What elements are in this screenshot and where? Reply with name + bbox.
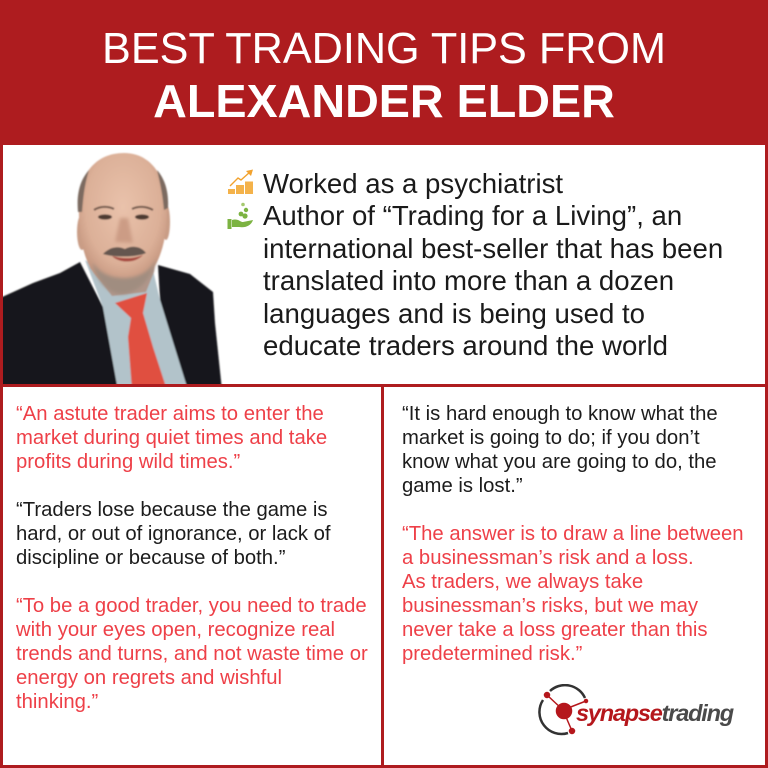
beard: [92, 258, 157, 294]
title: BEST TRADING TIPS FROM: [102, 25, 666, 73]
quote: good trader: thinking.”: [16, 691, 98, 713]
icon: rising chart with coins: [228, 170, 253, 194]
frame right: [765, 145, 768, 768]
moustache: [103, 247, 146, 257]
quote: traders lose: [16, 499, 331, 569]
quote: hard enough: “It is hard enough to know what the: [402, 403, 718, 425]
frame bottom: [0, 765, 768, 768]
quote: answer: a businessman’s risk and a loss.: [402, 547, 694, 569]
logo nodes: [544, 692, 588, 734]
about text: [263, 168, 723, 361]
brows: [94, 207, 153, 210]
eyes: [98, 214, 112, 220]
quote: hard enough: market is going to do; if you don’t: [402, 427, 700, 449]
quote: traders lose: hard, or out of ignorance, or lack of: [16, 523, 331, 545]
logo: synapsetrading: [538, 684, 734, 736]
quote: answer: “The answer is to draw a line between: [402, 523, 744, 545]
vertical divider: [381, 384, 384, 768]
horizontal divider: [0, 384, 768, 387]
quote: hard enough: [402, 403, 718, 497]
neck: [88, 240, 158, 296]
jacket: [0, 262, 222, 390]
quote: answer: never take a loss greater than this: [402, 619, 708, 641]
head: [79, 153, 167, 288]
portrait photo: [3, 152, 222, 384]
nose: [115, 218, 133, 243]
about text: Worked as a psychiatrist: [263, 168, 563, 199]
quote: traders lose: discipline or because of both.”: [16, 547, 285, 569]
quote: answer: [402, 523, 744, 665]
logo wordmark: synapsetrading: [576, 700, 734, 726]
quote: answer: As traders, we always take: [402, 571, 643, 593]
quote: good trader: [16, 595, 368, 713]
ears: [77, 214, 87, 250]
header band: [0, 0, 768, 145]
about text: international best-seller that has been: [263, 233, 723, 264]
quote: astute trader: profits during wild times.”: [16, 451, 240, 473]
quote: astute trader: market during quiet times and take: [16, 427, 327, 449]
right quotes: [402, 403, 744, 665]
quote: good trader: energy on regrets and wishful: [16, 667, 282, 689]
shirt: [85, 260, 188, 390]
quote: good trader: “To be a good trader, you need to trade: [16, 595, 367, 617]
frame left: [0, 145, 3, 768]
about text: Author of “Trading for a Living”, an: [263, 200, 682, 231]
quote: answer: predetermined risk.”: [402, 643, 582, 665]
quote: hard enough: game is lost.”: [402, 475, 523, 497]
title: [102, 25, 666, 127]
quote: good trader: with your eyes open, recognize real: [16, 619, 335, 641]
mouth: [112, 255, 143, 262]
quote: hard enough: know what you are going to do, the: [402, 451, 717, 473]
quote: good trader: trends and turns, and not waste time or: [16, 643, 368, 665]
quote: astute trader: [16, 403, 327, 473]
left quotes: [16, 403, 368, 713]
quote: traders lose: “Traders lose because the game is: [16, 499, 328, 521]
about text: translated into more than a dozen: [263, 265, 674, 296]
logo ring: [550, 685, 585, 698]
about text: languages and is being used to: [263, 298, 645, 329]
title: ALEXANDER ELDER: [153, 75, 615, 127]
hair sides: [78, 170, 168, 212]
icon: hand with coins: [228, 202, 253, 229]
about text: educate traders around the world: [263, 330, 668, 361]
quote: astute trader: “An astute trader aims to enter the: [16, 403, 324, 425]
quote: answer: businessman’s risks, but we may: [402, 595, 698, 617]
tie: [115, 293, 167, 390]
